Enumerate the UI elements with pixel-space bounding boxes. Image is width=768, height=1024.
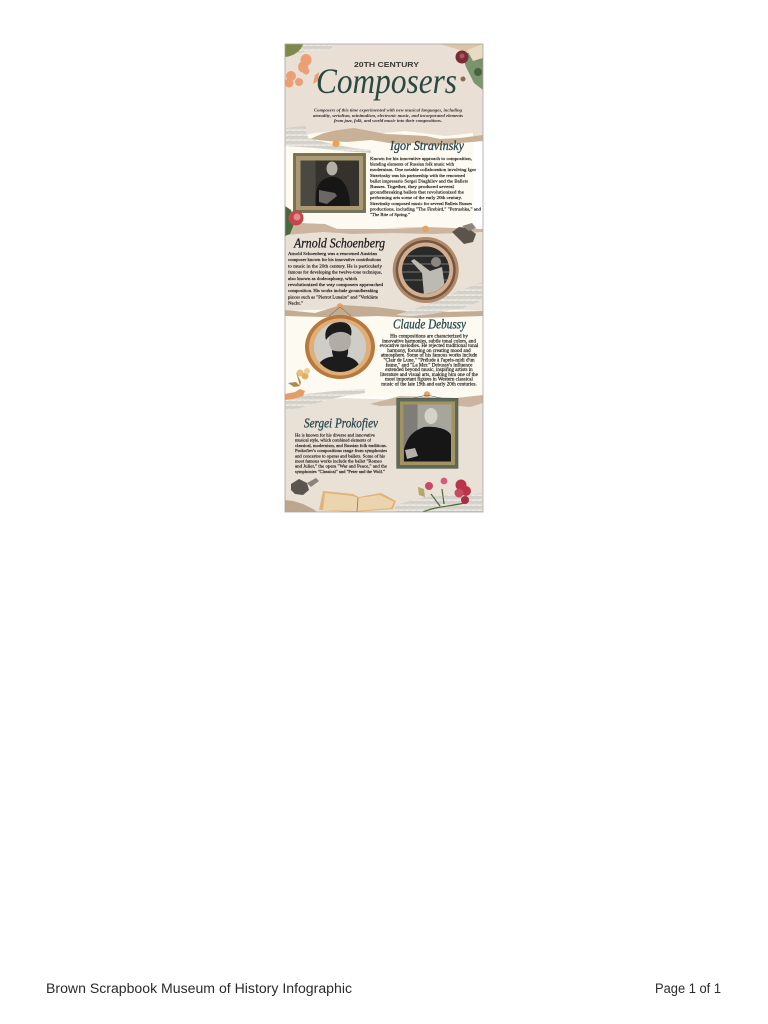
text: Prokofiev biography: and concertos to operas and ballets. Some of his	[295, 453, 385, 458]
text: Prokofiev biography: and Juliet," the opera "War and Peace," and the	[295, 464, 387, 470]
text: Debussy biography: faune," and "La Mer." Debussy's influence	[386, 361, 473, 368]
icon: yellow flower	[285, 368, 310, 400]
text: Debussy biography: music of the late 19th and early 20th centuries.	[381, 380, 477, 388]
text: Schoenberg biography: also known as dodecaphony, which	[288, 276, 358, 282]
title: 20th century: 20TH CENTURY	[354, 60, 419, 69]
icon: open book	[319, 491, 396, 512]
text: Stravinsky biography: modernism. One notable collaboration involving Igor	[370, 167, 477, 172]
brown paper corner	[442, 44, 482, 66]
text: Prokofiev biography: classical, modernism, and Russian folk traditions.	[295, 443, 387, 449]
text: Schoenberg biography: Arnold Schoenberg was a renowned Austrian	[288, 251, 378, 256]
heading: Claude Debussy: Claude Debussy	[393, 318, 467, 332]
sheet music strip: left	[285, 389, 365, 410]
text: Stravinsky biography: Russes. Together, they produced several	[370, 184, 455, 190]
text: Prokofiev biography	[295, 432, 387, 474]
text: Stravinsky biography: ballet impresario Sergei Diaghilev and the Ballets	[370, 178, 468, 183]
text: Debussy biography: extended beyond music, inspiring artists in	[385, 367, 473, 373]
text: Schoenberg biography: composition. His works include groundbreaking	[288, 288, 379, 293]
text: Stravinsky biography: "The Rite of Spring."	[370, 212, 410, 217]
icon: pin 2	[422, 226, 429, 232]
panel: title background	[285, 44, 483, 136]
footer: page number: Page 1 of 1	[655, 981, 721, 996]
text: Debussy biography: atmosphere. Some of his famous works include	[381, 352, 478, 359]
panel: Schoenberg background	[285, 227, 483, 312]
text: Stravinsky biography: Stravinsky composed music for several Ballets Russes	[370, 201, 472, 206]
icon: pink flowers	[418, 478, 471, 512]
icon: red rose with leaves	[285, 206, 304, 236]
text: Debussy biography: innovative harmonies, subtle tonal colors, and	[382, 338, 476, 344]
sheet music strip: bottom	[395, 493, 483, 512]
text: Debussy biography: most important figures in Western classical	[385, 376, 474, 383]
hanging wire 3	[329, 307, 351, 316]
panel: Prokofiev background	[285, 398, 483, 512]
text: Schoenberg biography: famous for developing the twelve-tone technique,	[288, 270, 382, 276]
torn strip 4	[370, 395, 483, 407]
text: Stravinsky biography: Stravinsky was his partnership with the renowned	[370, 173, 466, 178]
sheet music strip: top corner	[298, 45, 334, 53]
text: Schoenberg biography	[288, 251, 384, 306]
text: Debussy biography: literature and visual arts, making him one of the	[380, 371, 479, 378]
torn strip 3	[285, 305, 483, 318]
intro text: atonality, serialism, minimalism, electronic music, and incorporated elements	[313, 113, 463, 118]
intro text: from jazz, folk, and world music into their compositions.	[334, 118, 442, 123]
portrait frame: Stravinsky	[294, 154, 366, 212]
icon: orange flowers	[284, 54, 319, 88]
icon: pin 1	[332, 140, 340, 147]
heading: Arnold Schoenberg: Arnold Schoenberg	[293, 236, 385, 252]
text: Prokofiev biography: He is known for his diverse and innovative	[295, 432, 375, 438]
portrait frame: Prokofiev	[397, 398, 458, 468]
portrait frame: Schoenberg	[393, 237, 459, 303]
text: Stravinsky biography: Known for his innovative approach to composition,	[370, 156, 472, 162]
heading: Igor Stravinsky: Igor Stravinsky	[389, 139, 465, 154]
poster	[284, 44, 483, 512]
icon: leaf top left	[285, 44, 303, 57]
text: Schoenberg biography: Nacht."	[288, 301, 303, 306]
icon: torn paper bottom left	[285, 500, 317, 512]
text: Debussy biography: His compositions are characterized by	[390, 334, 468, 340]
text: Stravinsky biography: performing arts scene of the early 20th century.	[370, 195, 462, 200]
text: Schoenberg biography: revolutionized the way composers approached	[288, 282, 384, 287]
sheet music strip: right	[396, 282, 483, 316]
heading: Sergei Prokofiev: Sergei Prokofiev	[304, 416, 379, 432]
title: Composers: Composers	[316, 61, 457, 101]
hanging wire 4	[412, 394, 442, 398]
panel: Debussy background	[285, 309, 483, 400]
text: Prokofiev biography: Prokofiev's compositions range from symphonies	[295, 448, 387, 453]
icon: moth bottom left	[291, 478, 319, 495]
text: Stravinsky biography: productions, including "The Firebird," "Petrushka," and	[370, 206, 482, 212]
text: Schoenberg biography: to music in the 20th century. He is particularly	[288, 263, 383, 268]
text: Stravinsky biography: groundbreaking ballets that revolutionized the	[370, 190, 464, 195]
poster border	[285, 44, 483, 512]
text: Debussy biography: "Clair de Lune," "Prélude à l'après-midi d'un	[383, 358, 475, 364]
text: Debussy biography: evocative melodies. He rejected traditional tonal	[380, 343, 479, 349]
portrait frame: Debussy	[305, 315, 375, 379]
text: Debussy biography: harmony, focusing on creating mood and	[387, 347, 471, 354]
sheet music strip: top left	[285, 126, 371, 153]
text: Schoenberg biography: composer known for his innovative contributions	[288, 257, 381, 262]
text: Prokofiev biography: musical style, which combined elements of	[295, 438, 371, 444]
text: Prokofiev biography: symphonies "Classical" and "Peter and the Wolf."	[295, 469, 385, 474]
intro text	[313, 108, 463, 123]
text: Prokofiev biography: most famous works include the ballet "Romeo	[295, 458, 383, 464]
torn strip 1	[310, 128, 483, 146]
text: Debussy biography	[380, 334, 479, 388]
footer: document title: Brown Scrapbook Museum of History Infographic	[46, 981, 352, 996]
icon: pin 4	[424, 391, 430, 398]
text: Schoenberg biography: pieces such as "Pierrot Lunaire" and "Verklärte	[288, 294, 378, 299]
intro text: Composers of this time experimented with new musical languages, including	[314, 108, 463, 112]
icon: red berry and leaves	[456, 44, 483, 90]
icon: moth top right	[452, 223, 476, 244]
text: Stravinsky biography	[370, 156, 482, 217]
icon: pin 3	[337, 303, 343, 310]
text: Stravinsky biography: blending elements of Russian folk music with	[370, 162, 455, 167]
torn strip 2	[285, 223, 483, 235]
panel: Stravinsky background	[285, 130, 473, 230]
